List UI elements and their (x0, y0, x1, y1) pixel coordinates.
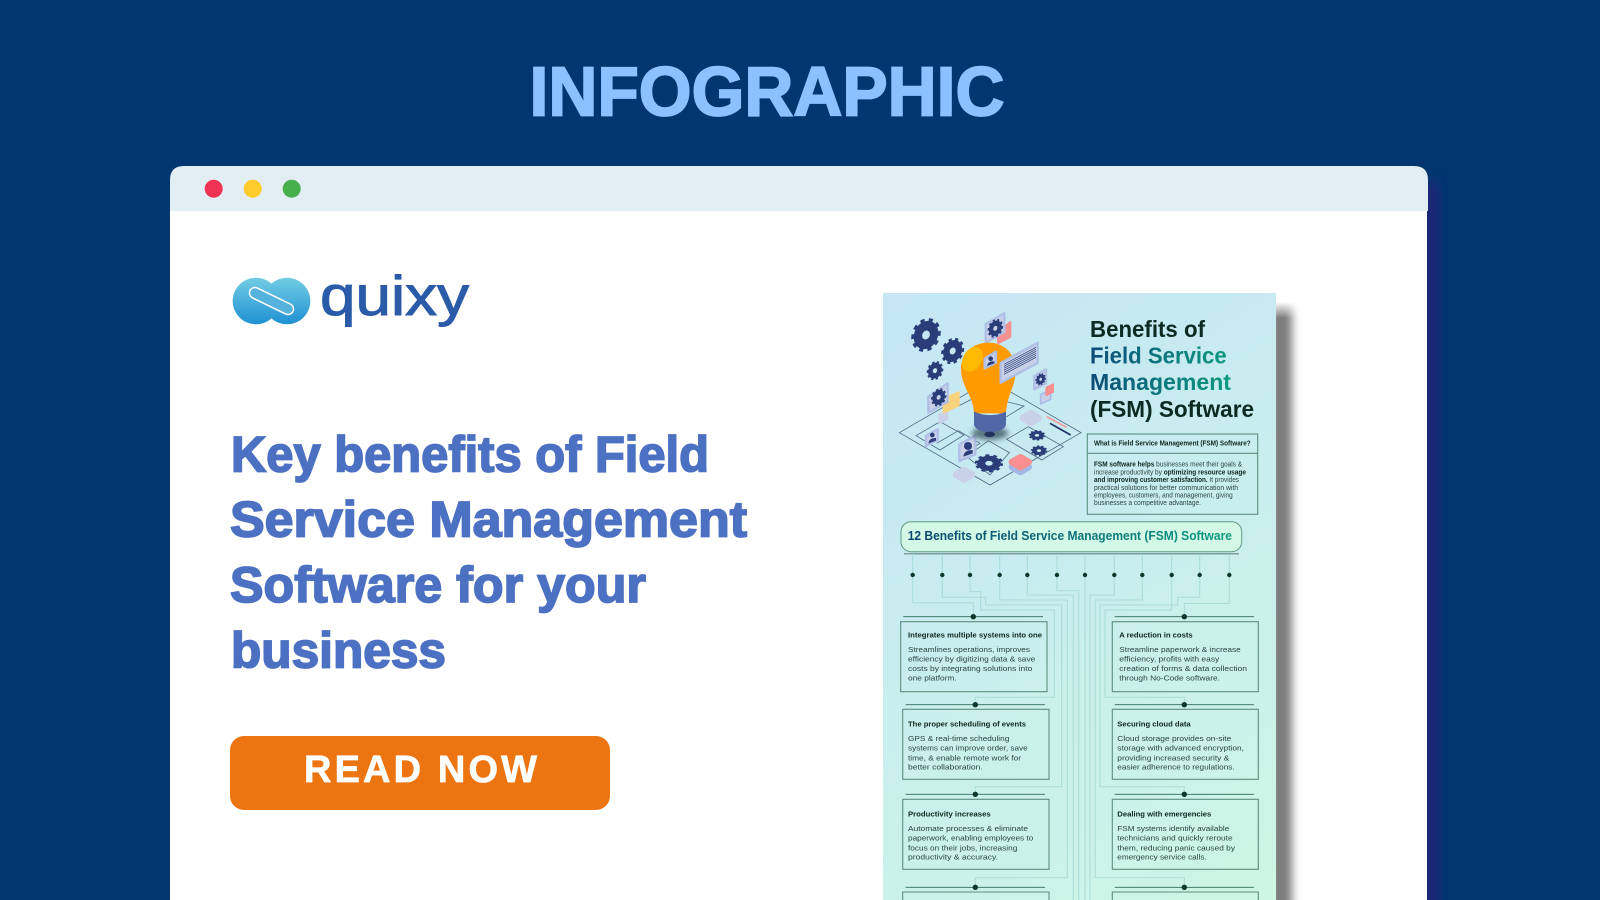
browser window (170, 166, 1428, 900)
card: a reduction in costs: Streamline paperwork & increase (1119, 645, 1241, 654)
card: dealing with emergencies: them, reducing panic caused by (1117, 843, 1235, 852)
card: a reduction in costs: A reduction in costs (1119, 630, 1193, 639)
card: integrates multiple systems: costs by integrating solutions into (908, 664, 1032, 673)
heading: Service Management (230, 492, 747, 548)
definition box (1087, 434, 1258, 514)
connector network (904, 554, 1239, 900)
card: dealing with emergencies: emergency service calls. (1117, 853, 1207, 862)
flat tiles (956, 413, 1071, 480)
button: read now: READ NOW (304, 749, 537, 791)
card: a reduction in costs (1112, 614, 1258, 692)
card: proper scheduling of events: GPS & real-time scheduling (908, 734, 1009, 743)
card: integrates multiple systems: efficiency by digitizing data & save (908, 654, 1035, 663)
benefits banner (901, 522, 1242, 552)
poster shadow (1270, 302, 1292, 900)
bulb highlight (958, 343, 987, 376)
bulb base (974, 412, 1006, 432)
card: integrates multiple systems: Streamlines operations, improves (908, 645, 1030, 654)
card: securing cloud data: providing increased security & (1117, 753, 1229, 762)
logo: quixy (233, 264, 469, 327)
illustration: light bulb with gears (899, 313, 1081, 485)
card: proper scheduling of events: time, & enable remote work for (908, 753, 1022, 762)
right cards (1034, 369, 1053, 404)
card: productivity increases: productivity & accuracy. (908, 853, 998, 862)
card: a reduction in costs: efficiency, profits with easy (1119, 654, 1220, 663)
title: INFOGRAPHIC (530, 52, 1004, 130)
definition box: increase productivity by optimizing resource usage (1094, 467, 1246, 476)
definition box: employees, customers, and management, giving (1094, 490, 1233, 500)
card: productivity increases: focus on their jobs, increasing (908, 843, 1017, 852)
logo wordmark: quixy (320, 264, 469, 327)
card: proper scheduling of events (903, 702, 1049, 779)
next row of cards, cropped (903, 885, 1258, 900)
poster: benefits of FSM software (883, 293, 1276, 900)
benefits banner: 12 Benefits of Field Service Management (FSM) Software (908, 528, 1232, 543)
card: securing cloud data: storage with advanced encryption, (1117, 744, 1244, 753)
window title bar (170, 166, 1428, 211)
heading: Software for your (230, 557, 646, 613)
definition box: businesses a competitive advantage. (1094, 498, 1201, 507)
card: proper scheduling of events: systems can improve order, save (908, 744, 1028, 753)
card: dealing with emergencies (1112, 792, 1258, 869)
card: a reduction in costs: through No-Code software. (1119, 674, 1220, 683)
bulb tip (984, 432, 995, 437)
definition box: What is Field Service Management (FSM) Software? (1094, 438, 1251, 448)
card: productivity increases: Automate processes & eliminate (908, 824, 1028, 833)
window control: red (205, 180, 223, 198)
heading: business (231, 622, 446, 678)
window body (170, 205, 1427, 900)
window control: yellow (244, 180, 262, 198)
card: productivity increases: paperwork, enabling employees to (908, 834, 1033, 843)
poster title (1090, 316, 1254, 422)
definition box: and improving customer satisfaction. It provides (1094, 475, 1239, 484)
definition box: FSM software helps businesses meet their goals & (1094, 460, 1242, 469)
poster title: Management (1090, 369, 1231, 395)
bulb glass (961, 343, 1016, 413)
card: dealing with emergencies: technicians and quickly reroute (1117, 834, 1233, 843)
icon: infinity mark (233, 278, 310, 324)
flat gears (977, 431, 1046, 471)
card: proper scheduling of events: better collaboration. (908, 763, 983, 772)
card: dealing with emergencies: FSM systems identify available (1117, 824, 1229, 833)
heading: Key benefits of Field (231, 426, 709, 482)
person icon (987, 356, 994, 366)
card: proper scheduling of events: The proper scheduling of events (908, 720, 1026, 729)
poster title: Benefits of (1090, 316, 1205, 342)
card: integrates multiple systems (901, 614, 1047, 692)
window drop shadow (1390, 174, 1439, 900)
window control: green (283, 180, 301, 198)
card: securing cloud data: easier adherence to regulations. (1117, 763, 1235, 772)
heading (230, 426, 747, 678)
definition box: practical solutions for better communication with (1094, 483, 1238, 492)
poster title: Field Service (1090, 342, 1227, 368)
card: securing cloud data (1112, 702, 1258, 779)
text card (1001, 343, 1038, 383)
card: a reduction in costs: creation of forms & data collection (1119, 664, 1247, 673)
isometric floor plan lines (899, 380, 1081, 485)
card: securing cloud data: Cloud storage provides on-site (1117, 734, 1231, 743)
left cards (926, 383, 975, 461)
card: productivity increases (903, 792, 1049, 869)
card: integrates multiple systems: Integrates multiple systems into one (908, 630, 1042, 639)
person card on bulb (985, 352, 996, 368)
card: dealing with emergencies: Dealing with emergencies (1117, 809, 1211, 818)
floating gears (908, 316, 966, 381)
button: read now (230, 736, 610, 810)
top card with gear (986, 313, 1010, 343)
bulb shadow (972, 427, 1008, 440)
card: securing cloud data: Securing cloud data (1117, 720, 1192, 729)
card: productivity increases: Productivity increases (908, 809, 991, 818)
poster title: (FSM) Software (1090, 396, 1254, 422)
poster background (883, 293, 1276, 900)
card: integrates multiple systems: one platform. (908, 674, 957, 683)
